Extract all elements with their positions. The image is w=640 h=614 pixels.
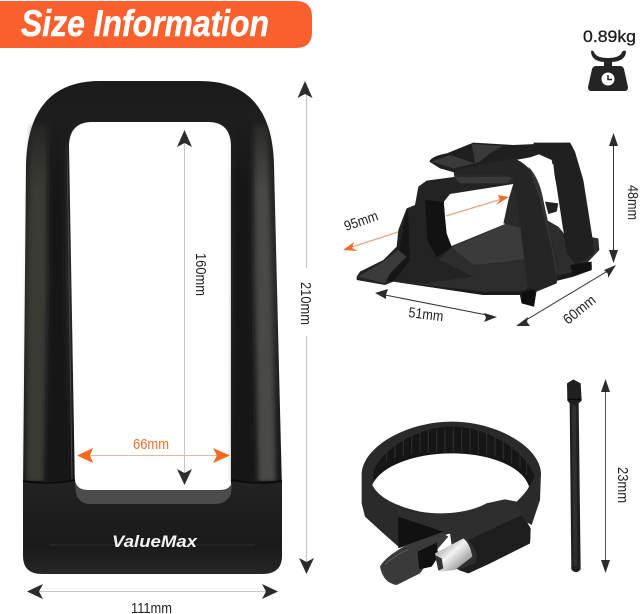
- dimension: 51mm: [375, 289, 497, 325]
- icon: kitchen scale: [588, 51, 628, 91]
- back strap: [533, 143, 594, 265]
- banner: size information: [0, 1, 312, 48]
- dimension: 66mm: [77, 436, 230, 463]
- metal bolt: [435, 538, 472, 572]
- dimension: 23mm: [601, 379, 631, 573]
- dimension: 23mm: 23mm: [614, 467, 631, 503]
- lock crossbar: [23, 481, 282, 574]
- dimension: 160mm: 160mm: [192, 253, 209, 296]
- cable tie: [567, 379, 582, 572]
- base plate: [393, 220, 599, 307]
- clamp body: [397, 499, 531, 573]
- strap clamp: [362, 422, 541, 585]
- thumb lever: [380, 533, 448, 585]
- dimension: 95mm: 95mm: [342, 207, 380, 234]
- shackle shading: [26, 125, 276, 482]
- dimension: 160mm: [177, 130, 209, 485]
- strap inner ribs: [373, 427, 535, 487]
- brand label: ValueMax: [112, 532, 199, 551]
- u-lock: [23, 81, 282, 574]
- window white: [444, 184, 513, 245]
- rear gap and tab: [540, 164, 557, 202]
- dimension: 210mm: 210mm: [297, 282, 314, 325]
- top clamp: [429, 143, 573, 174]
- heading: Size Information: [21, 3, 269, 44]
- strap opening: [372, 453, 529, 513]
- rear pillar: [503, 180, 533, 230]
- plate under clamp: [453, 159, 518, 183]
- dimension: 111mm: [27, 584, 278, 614]
- weight: [583, 28, 636, 91]
- strap band: [362, 422, 541, 547]
- front strap: [453, 158, 558, 292]
- weight label: 0.89kg: [583, 28, 636, 46]
- dimension: 60mm: 60mm: [560, 292, 599, 328]
- dimension: 51mm: 51mm: [408, 305, 444, 325]
- lock shackle: [23, 81, 282, 490]
- dimension: 60mm: [516, 265, 616, 328]
- dimension: 66mm: 66mm: [133, 436, 169, 453]
- dimension: 48mm: [609, 133, 640, 263]
- bracket mount: [357, 143, 599, 307]
- left foot and arch: [357, 177, 520, 285]
- dimension: 95mm: [342, 195, 509, 251]
- dimension: 210mm: [297, 81, 314, 574]
